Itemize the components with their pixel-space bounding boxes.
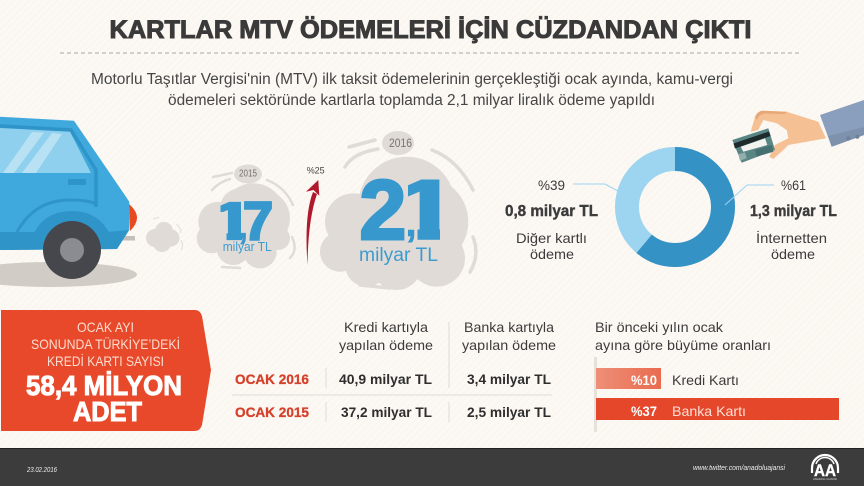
donut label: internet payment: %61	[781, 177, 806, 193]
intro text: ödemeleri sektöründe kartlarla toplamda 2,1 milyar liralık ödeme yapıldı	[168, 92, 655, 109]
number: 2,1: ,	[406, 201, 417, 245]
donut label: internet payment: İnternetten	[756, 229, 827, 246]
arrow: %25 growth: %25	[307, 165, 325, 176]
logo: AA: ANADOLU AJANSI	[813, 477, 837, 481]
donut label: internet payment	[750, 177, 837, 262]
table header: credit card payments	[339, 319, 433, 353]
bar: bank card 37%: %37	[631, 403, 657, 419]
table header: credit card payments: Kredi kartıyla	[344, 319, 428, 335]
donut label: other card payment: Diğer kartlı	[516, 230, 587, 246]
number: 1,7: ,	[238, 206, 248, 246]
donut label: internet payment: ödeme	[771, 246, 815, 262]
callout: credit card count	[1, 310, 211, 431]
arrow: %25 growth	[306, 165, 325, 265]
callout: credit card count: SONUNDA TÜRKİYE’DEKİ	[31, 335, 180, 352]
bar: credit card 10%: Kredi Kartı	[672, 372, 739, 388]
bar chart heading: Bir önceki yılın ocak	[595, 319, 724, 335]
number: 1,7: 1	[210, 191, 255, 251]
table row: January 2015: 2,5 milyar TL	[467, 404, 551, 420]
bar chart heading	[595, 319, 771, 353]
label: 2016: 2016	[389, 136, 412, 150]
website: www.twitter.com/anadoluajansi	[693, 463, 785, 472]
cloud: 2016 value	[320, 131, 476, 290]
intro text	[91, 71, 733, 109]
unit: milyar TL: milyar TL	[223, 240, 272, 254]
bar: credit card 10%: %10	[631, 372, 657, 388]
cloud: 2015 value	[197, 164, 295, 268]
bar: bank card 37%	[596, 398, 839, 420]
intro text: Motorlu Taşıtlar Vergisi'nin (MTV) ilk taksit ödemelerinin gerçekleştiği ocak ayında, kamu-vergi	[91, 71, 733, 88]
table header: bank card payments: yapılan ödeme	[462, 337, 556, 353]
donut label: other card payment: ödeme	[530, 246, 574, 262]
number: 2,1: 1	[391, 162, 462, 257]
table header: bank card payments: Banka kartıyla	[464, 319, 554, 335]
title: KARTLAR MTV ÖDEMELERİ İÇİN CÜZDANDAN ÇIKTI	[110, 15, 752, 44]
table row: January 2016	[235, 371, 551, 387]
bar: credit card 10%	[596, 368, 739, 389]
table row: January 2016: 3,4 milyar TL	[467, 371, 551, 387]
callout: credit card count: 58,4 MİLYON	[26, 370, 182, 401]
callout: credit card count: ADET	[73, 396, 142, 427]
table row: January 2016: OCAK 2016	[235, 371, 309, 387]
donut label: other card payment: %39	[538, 177, 565, 193]
table row: January 2015	[235, 404, 551, 420]
table header: credit card payments: yapılan ödeme	[339, 337, 433, 353]
number: 2,1	[360, 178, 440, 242]
footer bar	[0, 448, 864, 486]
table row: January 2015: OCAK 2015	[235, 404, 309, 420]
number: 2,1: 2	[360, 163, 406, 257]
bar: bank card 37%: Banka Kartı	[672, 403, 746, 419]
icon: hand holding card	[732, 100, 864, 163]
table row: January 2015: 37,2 milyar TL	[341, 404, 432, 420]
donut chart	[627, 159, 723, 255]
donut label: internet payment: 1,3 milyar TL	[750, 203, 837, 220]
unit: milyar TL: milyar TL	[359, 245, 438, 266]
label: 2015: 2015	[239, 169, 257, 180]
callout: credit card count: OCAK AYI	[77, 319, 134, 335]
table row: January 2016: 40,9 milyar TL	[339, 371, 432, 387]
donut label: other card payment	[505, 177, 598, 262]
bar chart heading: ayına göre büyüme oranları	[595, 337, 771, 353]
logo: AA: AA	[814, 461, 836, 480]
table header: bank card payments	[462, 319, 556, 353]
number: 1,7	[220, 201, 272, 244]
icon: car	[0, 117, 137, 287]
date: 23.02.2016	[26, 467, 57, 474]
smoke puff	[146, 218, 182, 252]
donut label: other card payment: 0,8 milyar TL	[505, 203, 598, 220]
callout: credit card count: KREDİ KARTI SAYISI	[47, 352, 164, 369]
logo: AA	[812, 455, 838, 481]
bar chart: growth rates	[594, 357, 839, 432]
number: 1,7: 7	[243, 192, 273, 252]
